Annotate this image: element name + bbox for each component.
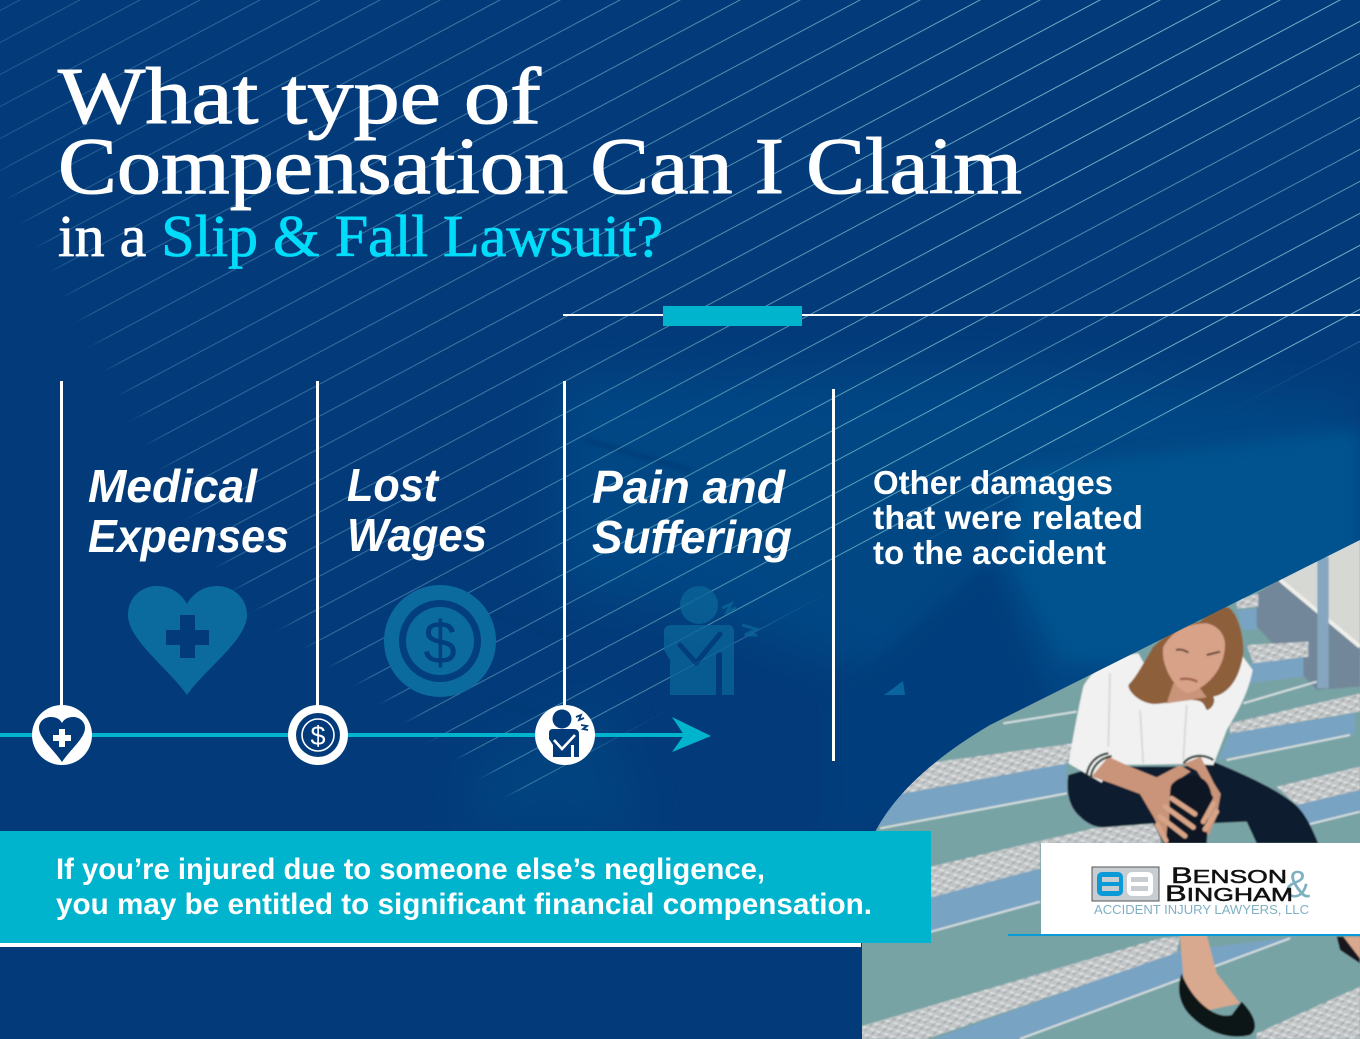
knee bbox=[1164, 776, 1212, 843]
logo: firm name: B ENSON bbox=[1171, 863, 1287, 888]
lower leg and shoes bbox=[1179, 935, 1360, 1037]
logo: ampersand: & bbox=[1285, 864, 1310, 906]
trousers bbox=[1068, 762, 1318, 843]
column: lost wages bbox=[288, 381, 496, 765]
heading: lost wages: Lost bbox=[347, 459, 440, 511]
stairs bbox=[857, 527, 1360, 1039]
face bbox=[1163, 623, 1225, 693]
stairwell wall bbox=[1257, 530, 1360, 690]
forearms bbox=[1092, 757, 1221, 842]
title bbox=[58, 51, 1022, 269]
logo: BB mark bbox=[1092, 867, 1159, 901]
column: medical expenses bbox=[32, 381, 289, 765]
heading: pain and suffering: Suffering bbox=[592, 511, 792, 563]
callout text bbox=[56, 853, 872, 921]
heading: medical expenses bbox=[88, 460, 289, 562]
column: other damages bbox=[832, 389, 1143, 761]
icon: timeline dollar marker bbox=[288, 705, 348, 765]
neck bbox=[1167, 683, 1207, 703]
icon: timeline person marker bbox=[535, 705, 595, 765]
callout banner bbox=[0, 831, 931, 947]
hair bbox=[1128, 607, 1243, 710]
blouse bbox=[1068, 653, 1253, 783]
callout text: you may be entitled to significant financial compensation. bbox=[56, 888, 872, 921]
icon: timeline heart marker bbox=[32, 705, 92, 765]
callout text: If you’re injured due to someone else’s negligence, bbox=[56, 853, 765, 886]
diagonal line pattern bbox=[0, 0, 1360, 797]
heading: pain and suffering bbox=[592, 461, 792, 563]
text: other damages bbox=[873, 464, 1143, 571]
title: in a Slip & Fall Lawsuit? bbox=[58, 203, 663, 269]
stair risers bbox=[877, 608, 1360, 1039]
fingers bbox=[1157, 798, 1217, 841]
icon: large heart with cross bbox=[128, 586, 247, 695]
text: other damages: Other damages bbox=[873, 464, 1113, 501]
title: What type of bbox=[58, 51, 541, 141]
heading: pain and suffering: Pain and bbox=[592, 461, 786, 513]
column: pain and suffering bbox=[535, 381, 792, 765]
heading: lost wages bbox=[347, 459, 487, 561]
logo: tagline: ACCIDENT INJURY LAWYERS, LLC bbox=[1094, 903, 1309, 917]
woman bbox=[1068, 607, 1318, 843]
photo: woman holding knee on stairs bbox=[857, 527, 1360, 1039]
icon: large person with sore shoulder bbox=[664, 586, 757, 695]
tread highlights bbox=[880, 682, 1360, 1039]
top divider with accent block bbox=[563, 306, 1360, 326]
heading: medical expenses: Medical bbox=[88, 460, 258, 512]
logo panel bbox=[1008, 843, 1360, 936]
logo: firm name bbox=[1165, 863, 1293, 906]
blouse cuffs bbox=[1087, 753, 1213, 778]
timeline axis with arrow bbox=[0, 717, 711, 752]
metal stair nosings bbox=[860, 593, 1360, 1039]
icon: large dollar coin bbox=[384, 585, 496, 697]
heading: lost wages: Wages bbox=[347, 509, 487, 561]
text: other damages: that were related bbox=[873, 499, 1143, 536]
text: other damages: to the accident bbox=[873, 534, 1106, 571]
logo: firm name: B INGHAM bbox=[1165, 881, 1293, 906]
icon: timeline dollar marker: $ bbox=[310, 721, 326, 751]
icon: large dollar coin: $ bbox=[423, 609, 457, 676]
title: Compensation Can I Claim bbox=[58, 121, 1022, 211]
heading: medical expenses: Expenses bbox=[88, 510, 289, 562]
